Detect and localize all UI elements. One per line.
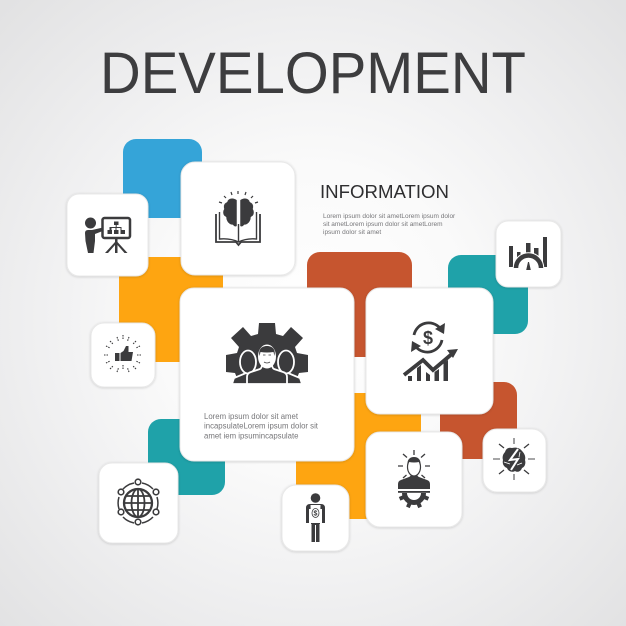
icon: person with coin: $ xyxy=(314,510,318,518)
panel: brain lightning xyxy=(483,429,546,492)
icon: brain with bolt and rays xyxy=(493,438,535,480)
icon: dollar cycle and rising chart: $ xyxy=(423,328,433,348)
text: main description: amet iem ipsumincapsulate xyxy=(204,432,298,440)
icon: globe with nodes xyxy=(118,479,159,525)
icon: team in gear xyxy=(226,323,308,384)
text: main description: Lorem ipsum dolor sit amet xyxy=(204,412,299,421)
block: teal left xyxy=(148,419,225,495)
text: information description: Lorem ipsum dolor sit ametLorem ipsum dolor xyxy=(323,213,456,220)
block: blue xyxy=(123,139,202,218)
panel: thumbs up xyxy=(91,323,155,387)
text: information description: sit ametLorem ipsum dolor sit ametLorem xyxy=(323,221,443,228)
panel: main with team gear xyxy=(180,288,354,461)
block: red centre xyxy=(307,252,412,357)
text: main description: incapsulateLorem ipsum dolor sit xyxy=(204,422,319,430)
panel: person xyxy=(282,485,349,551)
block: orange upper xyxy=(119,257,223,362)
panel: presentation xyxy=(67,194,148,276)
panel: global network xyxy=(99,463,178,543)
icon: thumbs up with rays xyxy=(104,335,142,372)
icon: brain over open book xyxy=(216,191,260,245)
block: orange lower xyxy=(296,393,421,519)
title: DEVELOPMENT xyxy=(100,41,526,106)
block: red lower xyxy=(440,382,517,459)
text: information description: ipsum dolor sit amet xyxy=(323,229,381,236)
panel: brain and book xyxy=(181,162,295,275)
panel: money growth xyxy=(366,288,493,414)
block: teal right xyxy=(448,255,528,334)
icon: gauge with bars xyxy=(509,237,547,270)
icon: presenter at board xyxy=(85,218,130,253)
heading: information: INFORMATION xyxy=(320,181,449,202)
panel: gauge chart xyxy=(496,221,561,287)
panel: idea person in gear xyxy=(366,432,462,527)
icon: person head with rays over gear xyxy=(398,450,430,507)
